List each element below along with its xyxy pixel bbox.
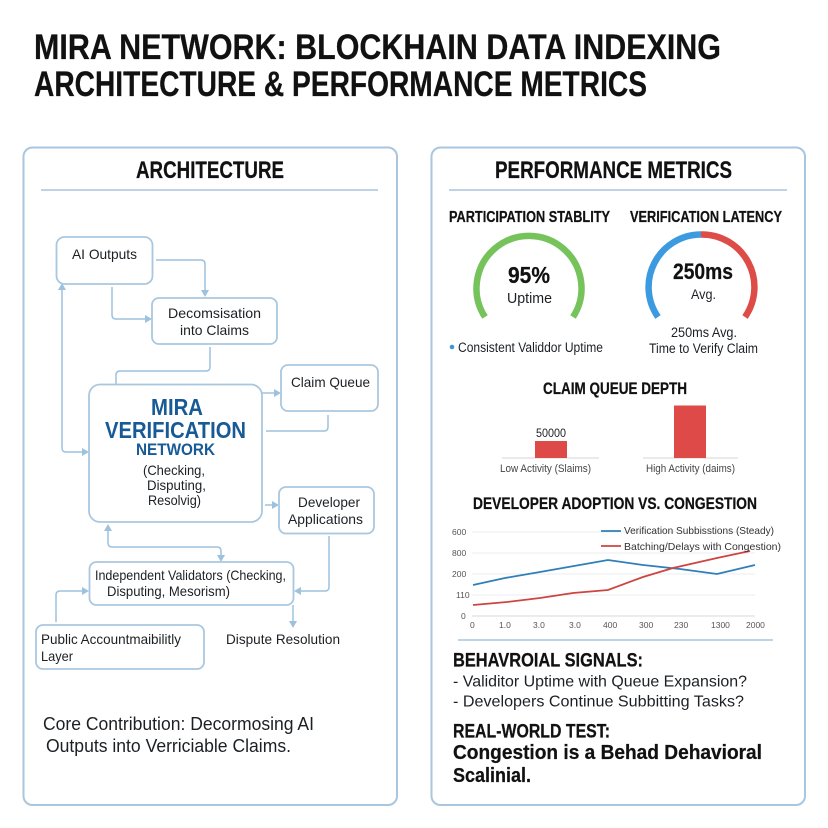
line chart: developer adoption vs congestion: 200 bbox=[452, 569, 466, 579]
gauge: participation stability: PARTICIPATION STABLITY bbox=[449, 209, 611, 226]
box: Mira verification network: Resolvig) bbox=[148, 492, 201, 508]
gauge: participation stability: Uptime bbox=[507, 290, 552, 307]
label: dispute resolution: Dispute Resolution bbox=[226, 631, 340, 647]
title bbox=[34, 28, 721, 104]
bar chart: claim queue depth bbox=[500, 380, 738, 475]
text: real-world test: REAL-WORLD TEST: bbox=[453, 722, 610, 742]
gauge: verification latency bbox=[630, 209, 783, 356]
line chart: developer adoption vs congestion: 300 bbox=[639, 620, 653, 630]
title: MIRA NETWORK: BLOCKHAIN DATA INDEXING bbox=[34, 28, 721, 67]
box: developer applications: Applications bbox=[288, 511, 363, 527]
box: Mira verification network: (Checking, bbox=[143, 462, 205, 478]
panel: architecture bbox=[24, 148, 397, 805]
gauge: participation stability bbox=[449, 209, 611, 355]
box: decomposition: Decomsisation bbox=[168, 305, 261, 321]
box: independent validators: Disputing, Mesorism) bbox=[107, 583, 230, 599]
line chart: developer adoption vs congestion: 600 bbox=[452, 527, 466, 537]
gauge: verification latency: 250ms Avg. bbox=[671, 325, 737, 340]
box: public accountability layer: Layer bbox=[41, 648, 73, 664]
box: Mira verification network: NETWORK bbox=[136, 440, 216, 459]
box: developer applications: Developer bbox=[298, 494, 360, 510]
box: claim queue bbox=[281, 365, 378, 411]
bar chart: claim queue depth: High Activity (daims) bbox=[646, 463, 735, 475]
text: core contribution: Core Contribution: Decormosing AI bbox=[43, 714, 314, 734]
line chart: developer adoption vs congestion: 400 bbox=[603, 620, 617, 630]
bar chart: claim queue depth: Low Activity (Slaims) bbox=[500, 463, 591, 475]
line chart: developer adoption vs congestion: DEVELOPER ADOPTION VS. CONGESTION bbox=[473, 494, 757, 513]
box: AI outputs bbox=[56, 237, 152, 284]
box: public accountability layer: Public Accountmaibilitly bbox=[41, 631, 181, 647]
box: public accountability layer bbox=[36, 625, 204, 669]
text: core contribution: Outputs into Verriciable Claims. bbox=[46, 736, 291, 756]
box: AI outputs: AI Outputs bbox=[72, 246, 137, 262]
line chart: developer adoption vs congestion: 0 bbox=[470, 620, 475, 630]
chart legend: Batching/Delays with Congestion) bbox=[624, 541, 781, 553]
title: ARCHITECTURE & PERFORMANCE METRICS bbox=[34, 65, 647, 104]
heading: architecture: ARCHITECTURE bbox=[136, 157, 284, 184]
text: behavioral signals: - Developers Continue Subbitting Tasks? bbox=[453, 694, 744, 710]
text: real-world test: Congestion is a Behad Dehavioral bbox=[453, 742, 762, 764]
line chart: developer adoption vs congestion bbox=[452, 494, 781, 640]
box: Mira verification network: MIRA bbox=[151, 394, 203, 420]
box: developer applications bbox=[279, 487, 374, 534]
bar chart: claim queue depth: CLAIM QUEUE DEPTH bbox=[543, 380, 687, 398]
gauge: participation stability: 95% bbox=[508, 262, 550, 288]
box: independent validators: Independent Validators (Checking, bbox=[95, 567, 286, 583]
gauge: verification latency: 250ms bbox=[673, 259, 733, 284]
line chart: developer adoption vs congestion: 110 bbox=[456, 590, 470, 600]
bar chart: claim queue depth: 50000 bbox=[536, 428, 566, 440]
text: real-world test bbox=[453, 722, 762, 787]
box: independent validators bbox=[90, 562, 294, 605]
box: claim queue: Claim Queue bbox=[291, 374, 370, 390]
gauge: verification latency: VERIFICATION LATENCY bbox=[630, 209, 783, 226]
line chart: developer adoption vs congestion: 2000 bbox=[746, 620, 765, 630]
box: Mira verification network: Disputing, bbox=[147, 477, 206, 493]
line chart: developer adoption vs congestion: 0 bbox=[461, 611, 466, 621]
gauge: verification latency: Time to Verify Claim bbox=[649, 341, 758, 356]
chart legend bbox=[601, 525, 781, 553]
arrows: architecture flow bbox=[56, 260, 329, 628]
panel: performance metrics bbox=[432, 148, 805, 805]
text: behavioral signals: - Validitor Uptime with Queue Expansion? bbox=[453, 674, 747, 690]
text: core contribution bbox=[43, 714, 314, 756]
gauge: participation stability: Consistent Validdor Uptime bbox=[458, 340, 603, 355]
box: decomposition bbox=[152, 298, 277, 344]
line chart: developer adoption vs congestion: 800 bbox=[452, 548, 466, 558]
chart legend: Verification Subbisstions (Steady) bbox=[624, 525, 774, 537]
text: behavioral signals: BEHAVROIAL SIGNALS: bbox=[453, 650, 643, 672]
line chart: developer adoption vs congestion: 3.0 bbox=[569, 620, 581, 630]
line chart: developer adoption vs congestion: 1.0 bbox=[499, 620, 511, 630]
box: Mira verification network bbox=[89, 384, 262, 522]
line chart: developer adoption vs congestion: 1300 bbox=[711, 620, 730, 630]
line chart: developer adoption vs congestion: 230 bbox=[674, 620, 688, 630]
box: decomposition: into Claims bbox=[180, 322, 249, 338]
text: real-world test: Scalinial. bbox=[453, 765, 531, 787]
text: behavioral signals bbox=[453, 650, 747, 710]
heading: performance metrics: PERFORMANCE METRICS bbox=[495, 157, 732, 184]
box: Mira verification network: VERIFICATION bbox=[105, 417, 246, 443]
gauge: verification latency: Avg. bbox=[691, 287, 716, 302]
line chart: developer adoption vs congestion: 3.0 bbox=[533, 620, 545, 630]
